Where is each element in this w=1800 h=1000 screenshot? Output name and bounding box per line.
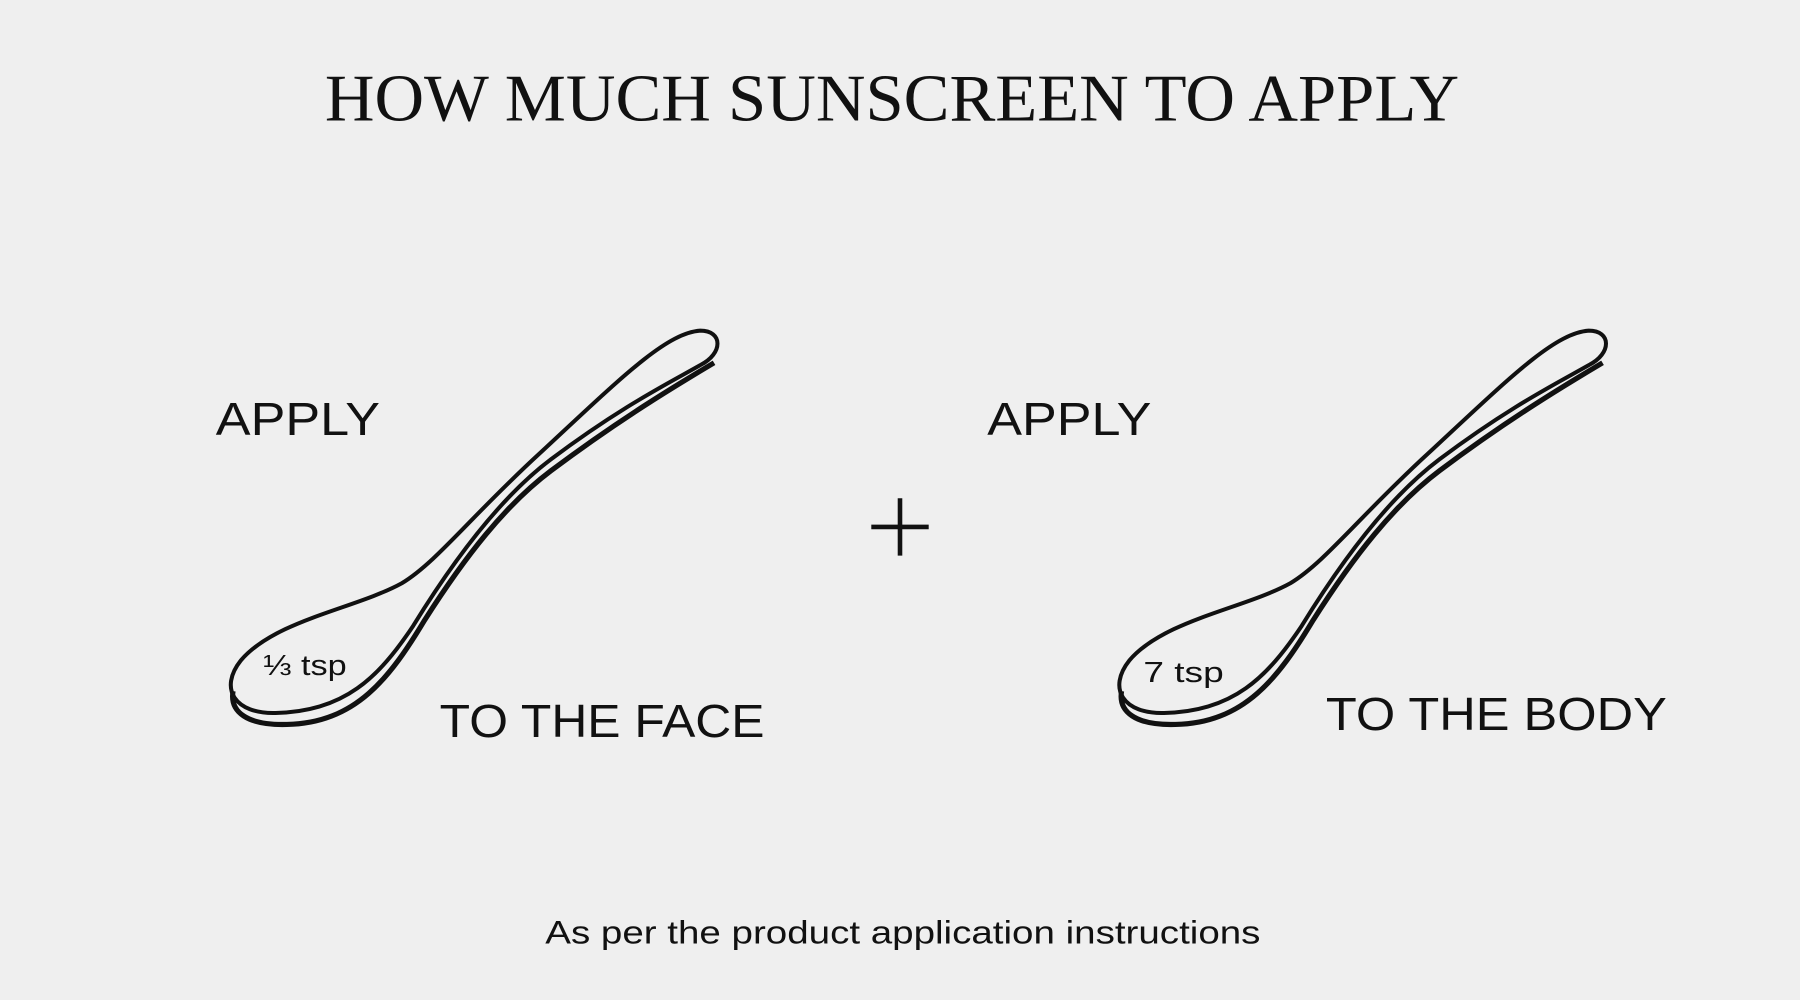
text: apply face: APPLY <box>216 393 380 445</box>
panel: face <box>216 331 765 747</box>
text: to the body: TO THE BODY <box>1326 688 1667 740</box>
label: face amount: ⅓ tsp <box>263 650 347 682</box>
panel: body <box>987 331 1667 740</box>
text: apply body: APPLY <box>987 393 1151 445</box>
label: body amount: 7 tsp <box>1143 657 1224 689</box>
icon: face spoon <box>231 331 717 724</box>
title: HOW MUCH SUNSCREEN TO APPLY <box>325 63 1459 136</box>
footer note: As per the product application instructions <box>545 915 1260 951</box>
icon: plus <box>871 498 929 556</box>
text: to the face: TO THE FACE <box>440 695 765 747</box>
icon: body spoon <box>1119 331 1606 724</box>
